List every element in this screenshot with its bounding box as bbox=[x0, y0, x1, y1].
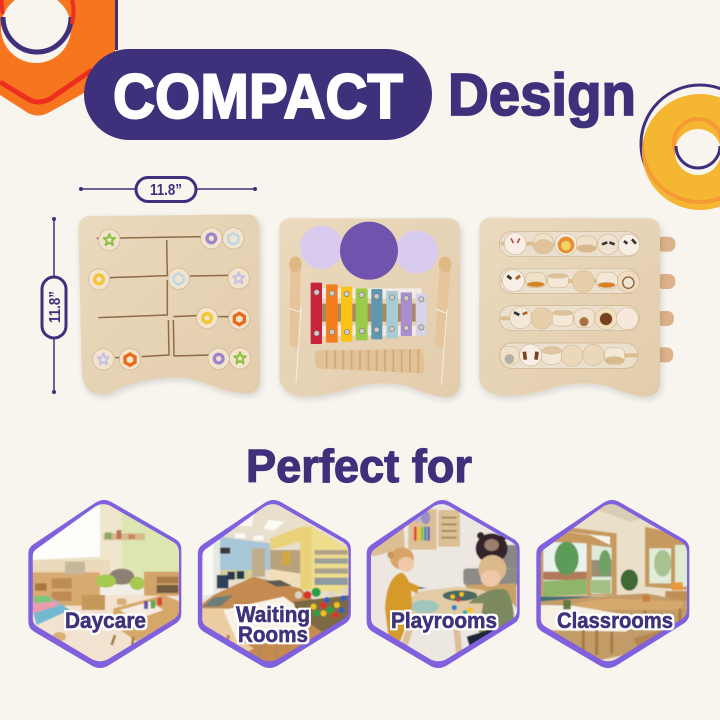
card: Daycare bbox=[28, 500, 183, 668]
dimension: width 11.8 inches bbox=[79, 178, 257, 202]
wooden guiro bbox=[315, 349, 424, 373]
photo: classroom bbox=[540, 504, 687, 662]
label: Waiting Rooms: Rooms bbox=[238, 622, 308, 647]
title badge: COMPACT bbox=[84, 49, 432, 140]
label: Waiting Rooms bbox=[236, 602, 310, 647]
label: Daycare: Daycare bbox=[65, 608, 146, 633]
photo: waiting room bbox=[202, 504, 348, 662]
card: Waiting Rooms bbox=[197, 498, 353, 668]
label: Classrooms: Classrooms bbox=[557, 608, 673, 633]
mallets bbox=[289, 256, 451, 385]
panel: animal sliding discs board bbox=[479, 218, 675, 397]
decoration: yellow donut bbox=[641, 85, 720, 210]
label: Playrooms: Playrooms bbox=[391, 608, 497, 633]
side pegs bbox=[655, 237, 675, 362]
heading: Perfect for: Perfect for bbox=[246, 440, 472, 492]
panel: xylophone board bbox=[279, 218, 460, 397]
row 1 discs bbox=[504, 233, 640, 256]
row 3 discs bbox=[510, 307, 638, 330]
dimension: height 11.8 inches: 11.8” bbox=[47, 291, 64, 323]
decoration: orange hexagon nut bbox=[0, 0, 118, 116]
title badge: COMPACT: COMPACT bbox=[113, 62, 403, 132]
title: Design: Design bbox=[448, 62, 636, 128]
dimension: height 11.8 inches bbox=[42, 217, 66, 394]
panel: sliding shapes board bbox=[78, 214, 260, 394]
card: Playrooms bbox=[365, 498, 522, 668]
label: Waiting Rooms: Waiting bbox=[236, 602, 310, 627]
row 4 discs bbox=[500, 344, 625, 366]
drum pads bbox=[300, 222, 438, 280]
photo: children in playroom bbox=[371, 504, 518, 662]
card: Classrooms bbox=[536, 500, 693, 670]
photo: daycare room bbox=[30, 500, 183, 667]
xylophone bbox=[311, 283, 427, 344]
dimension: width 11.8 inches: 11.8” bbox=[150, 182, 182, 199]
row 2 discs bbox=[502, 270, 639, 293]
